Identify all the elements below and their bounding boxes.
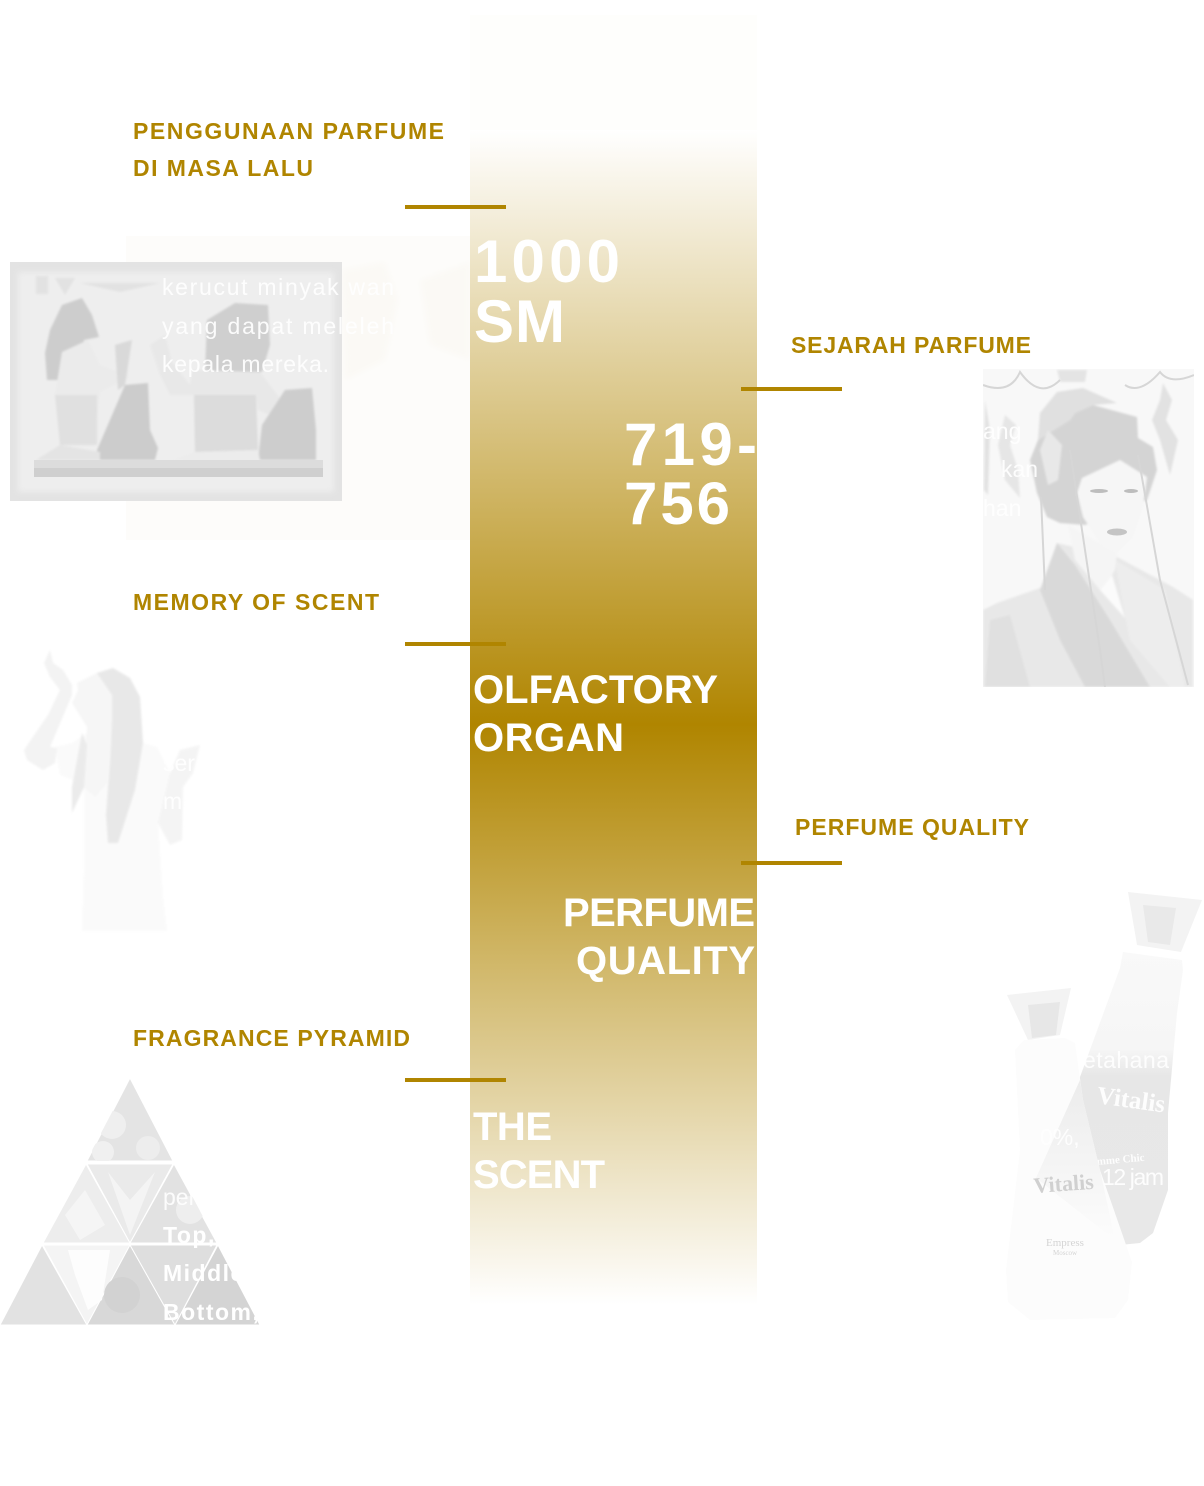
image: chinese empress portrait: [983, 369, 1194, 687]
image: vitalis perfume bottles: [1006, 892, 1202, 1320]
image: fragrance pyramid: [0, 1078, 260, 1325]
connector line 4: [741, 861, 842, 865]
raised arm: [24, 650, 72, 770]
image: woman smelling perfume: [24, 650, 200, 931]
overlay text fragments: woman: m: [163, 788, 182, 814]
overlay text fragments: bottles: etahana: [1083, 1047, 1169, 1073]
overlay text fragments: bottles: 0%,: [1040, 1124, 1080, 1150]
overlay text fragments: bottles: [1040, 1047, 1169, 1190]
faded egyptian background image: [126, 236, 470, 540]
overlay text fragments: portrait: ang: [983, 418, 1021, 444]
overlay text fragments: portrait: [983, 418, 1038, 521]
overlay text: kerucut: kepala mereka.: [162, 351, 329, 377]
connector line 1: [405, 205, 506, 209]
section: sejarah parfume heading: SEJARAH PARFUME: [791, 332, 1031, 358]
image: egyptian papyrus: [10, 262, 342, 501]
section: penggunaan parfume heading: DI MASA LALU: [133, 155, 313, 181]
section: perfume quality heading: PERFUME QUALITY: [795, 814, 1029, 840]
section: penggunaan parfume heading: PENGGUNAAN PARFUME: [133, 118, 444, 144]
overlay text: pyramid notes: Middle: [163, 1260, 245, 1286]
label: olfactory organ: [473, 668, 718, 760]
hair: [1030, 405, 1157, 525]
front bottle: [1006, 988, 1132, 1320]
crown: [1038, 388, 1117, 440]
label: the scent: SCENT: [473, 1153, 605, 1197]
second hand: [158, 745, 200, 845]
section: memory of scent heading: MEMORY OF SCENT: [133, 589, 379, 615]
front bottle: Moscow: [1053, 1249, 1078, 1257]
overlay text: pyramid notes: Top,: [163, 1222, 216, 1248]
front bottle: Empress: [1046, 1237, 1084, 1249]
overlay text fragments: woman: ser: [163, 750, 195, 776]
label: perfume quality: [563, 891, 755, 983]
overlay text: pyramid notes: per: [163, 1184, 197, 1210]
neck: [1074, 548, 1116, 588]
label: olfactory organ: OLFACTORY: [473, 668, 718, 712]
robe: [983, 543, 1193, 687]
label: the scent: THE: [473, 1105, 552, 1149]
section: fragrance pyramid heading: FRAGRANCE PYRAMID: [133, 1025, 410, 1051]
year: 719-756: 756: [624, 470, 730, 537]
face and neck: [72, 673, 112, 797]
facial features: [1090, 489, 1138, 536]
year: 1000 SM: [474, 228, 620, 355]
hanging ornaments: [1152, 383, 1178, 475]
year: 1000 SM: 1000: [474, 228, 620, 295]
overlay text: kerucut: kerucut minyak wan: [162, 274, 394, 300]
overlay text: pyramid notes: Bottom,: [163, 1299, 260, 1325]
hair: [97, 668, 143, 843]
back bottle: mme Chic: [1096, 1152, 1145, 1168]
face: [1077, 460, 1148, 524]
central gradient band: [470, 15, 757, 1305]
back bottle: Vitalis: [1095, 1082, 1167, 1119]
year: 1000 SM: SM: [474, 288, 565, 355]
year: 719-756: 719-: [624, 411, 757, 478]
front bottle: Vitalis: [1033, 1169, 1095, 1198]
overlay text: kerucut: yang dapat meleleh: [162, 313, 394, 339]
connector line 2: [741, 387, 842, 391]
connector line 5: [405, 1078, 506, 1082]
overlay text fragments: bottles: 12 jam: [1102, 1164, 1164, 1190]
label: the scent: [473, 1105, 605, 1197]
overlay text fragments: woman: [163, 750, 195, 814]
overlay text: kerucut: [162, 274, 394, 377]
year: 719-756: [624, 411, 757, 537]
label: olfactory organ: ORGAN: [473, 716, 624, 760]
overlay text fragments: portrait: kan: [1001, 456, 1038, 482]
back bottle: [1078, 892, 1202, 1245]
dress: [55, 720, 170, 931]
section: penggunaan parfume heading: [133, 118, 444, 181]
overlay text: pyramid notes: [163, 1184, 260, 1325]
label: perfume quality: PERFUME: [563, 891, 755, 935]
label: perfume quality: QUALITY: [576, 939, 755, 983]
overlay text fragments: portrait: han: [983, 495, 1021, 521]
connector line 3: [405, 642, 506, 646]
